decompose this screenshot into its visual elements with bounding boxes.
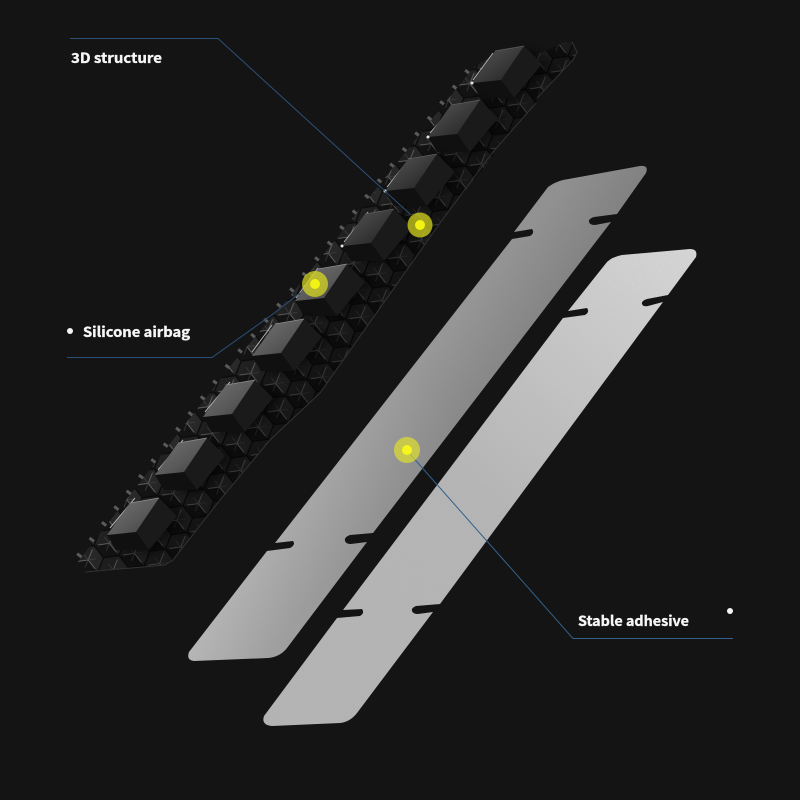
middle strip right shading [188,166,647,661]
strip rim [85,42,577,572]
marker: stable adhesive point [394,437,420,463]
airbag cubes [107,46,552,553]
leader line: 3D structure [70,38,410,214]
leader line: silicone airbag [67,293,300,358]
label: Stable adhesive: Stable adhesive [578,611,689,631]
label: Stable adhesive [578,608,733,631]
mesh body [77,42,577,572]
label: 3D structure: 3D structure [71,48,162,68]
label: Silicone airbag: Silicone airbag [83,322,191,342]
leader line: stable adhesive [410,454,733,638]
left edge highlights [110,53,493,528]
panel: silicone airbag strip with 3D structure [77,42,577,572]
strip teeth [79,66,473,557]
marker: silicone airbag point [302,271,328,297]
marker: 3D structure point [408,212,432,238]
mesh shading [77,42,577,572]
panel: middle adhesive strip [188,166,647,661]
panel: front light adhesive strip [263,249,696,726]
